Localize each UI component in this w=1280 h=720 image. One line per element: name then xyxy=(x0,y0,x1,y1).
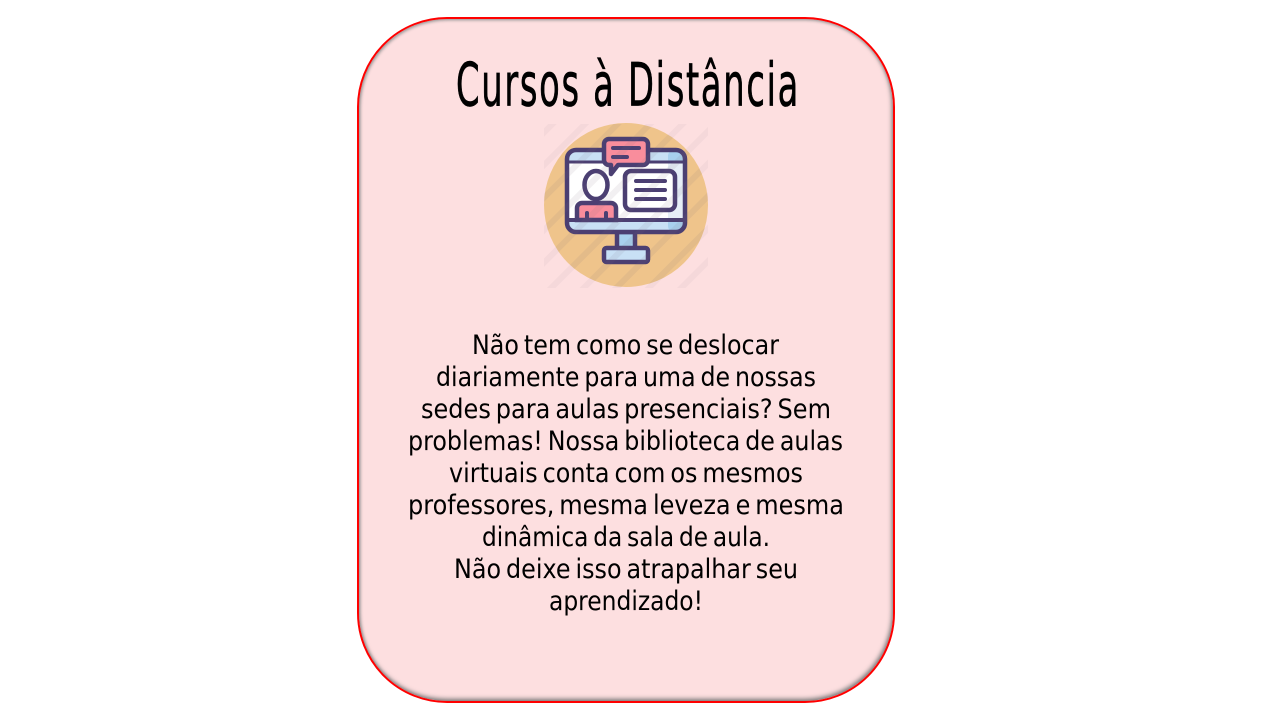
body text: sedes para aulas presenciais? Sem xyxy=(421,394,831,425)
panel: card background xyxy=(357,17,895,703)
body text: virtuais conta com os mesmos xyxy=(449,458,803,489)
icon: online class monitor xyxy=(544,123,708,288)
body text xyxy=(408,330,844,617)
body text: diariamente para uma de nossas xyxy=(436,362,816,393)
icon: diagonal stripes overlay xyxy=(544,124,708,288)
body text: professores, mesma leveza e mesma xyxy=(408,490,844,521)
body text: problemas! Nossa biblioteca de aulas xyxy=(408,426,843,457)
icon: person xyxy=(577,171,616,220)
body text: Não deixe isso atrapalhar seu xyxy=(454,554,798,585)
icon: text card xyxy=(625,171,675,210)
icon: speech bubble xyxy=(604,139,648,174)
icon background circle xyxy=(544,123,708,287)
body text: dinâmica da sala de aula. xyxy=(482,522,770,553)
icon: monitor stand xyxy=(604,232,648,262)
icon: monitor screen xyxy=(567,150,685,232)
icon: faint stripes behind circle xyxy=(544,124,708,288)
title: Cursos à Distância xyxy=(456,50,800,120)
body text: aprendizado! xyxy=(549,586,703,617)
body text: Não tem como se deslocar xyxy=(472,330,780,361)
